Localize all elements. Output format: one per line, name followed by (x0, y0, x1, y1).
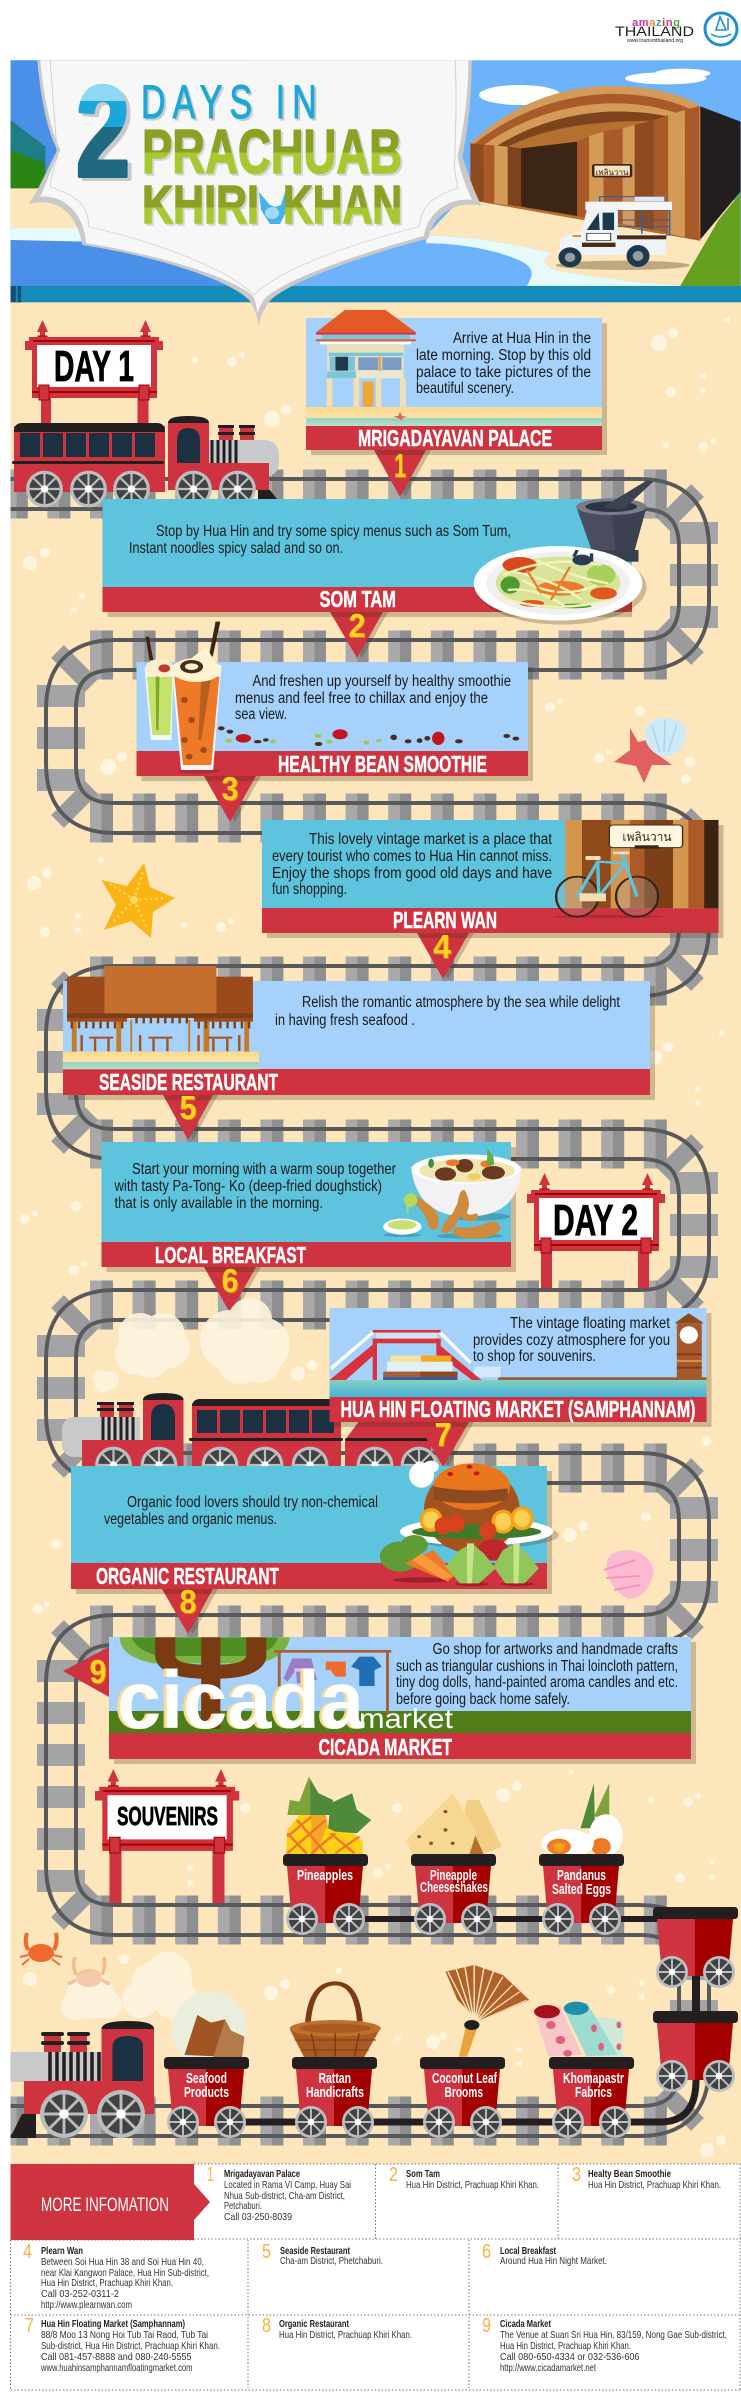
panel 5: Seaside Restaurant (63, 966, 655, 1140)
cart: rattan handicrafts (292, 2057, 377, 2138)
cart: pineapple cheeseshakes: Cheeseshakes (420, 1880, 488, 1896)
info 9: Cicada Market (482, 2315, 727, 2374)
info 6: Local Breakfast: Local Breakfast (500, 2245, 556, 2257)
panel 1: Mrigadayavan Palace (306, 310, 607, 497)
heading: HEALTHY BEAN SMOOTHIE (278, 751, 487, 777)
info 9: Cicada Market: 9 (482, 2315, 491, 2337)
info 1: Mrigadayavan Palace: Mrigadayavan Palace (224, 2168, 300, 2180)
track: railway sleepers and rails (5, 490, 698, 2124)
info 4: Plearn Wan (23, 2241, 209, 2311)
logo text: cicada market: cicada (117, 1655, 365, 1746)
hero sign: Plearn Wan in Thai: เพลินวาน (596, 168, 629, 177)
title banner (29, 60, 481, 326)
text block: in having fresh seafood . (275, 1012, 415, 1029)
panel 7: Hua Hin Floating Market (330, 1308, 712, 1467)
logo text: cicada market: market (359, 1703, 453, 1734)
illustration: salted eggs (541, 1783, 623, 1857)
locomotive (10, 2021, 154, 2138)
info 1: Mrigadayavan Palace: 1 (207, 2164, 214, 2186)
souvenir train: lower engine and carts (10, 1965, 738, 2138)
sign: Day 1: DAY 1 (54, 342, 134, 391)
panel 3: Healthy Bean Smoothie (136, 622, 533, 822)
panel 9: Cicada Market (63, 1637, 696, 1764)
text block: Arrive at Hua Hin in the (453, 330, 591, 347)
info 5: Seaside Restaurant: Cha-am District, Phetchaburi. (280, 2255, 383, 2267)
illustration: vintage wood wall and bicycle (553, 820, 719, 918)
info 9: Cicada Market: Cicada Market (500, 2318, 551, 2330)
text block (129, 523, 511, 557)
info 9: Cicada Market: http://www.cicadamarket.net (500, 2362, 596, 2374)
callout: more information (10, 2164, 210, 2240)
sign: Day 1 (25, 320, 163, 425)
info 6: Local Breakfast: Around Hua Hin Night Market. (500, 2255, 607, 2267)
text block: The vintage floating market (510, 1315, 671, 1332)
pointer 1 (374, 450, 431, 497)
text block: sea view. (235, 706, 287, 723)
info 3: Healty Bean Smoothie: 3 (572, 2164, 581, 2186)
info 9: Cicada Market: Call 080-650-4334 or 032-536-606 (500, 2351, 640, 2363)
number: 1 (394, 447, 406, 484)
info 6: Local Breakfast (482, 2241, 607, 2267)
pointer 6 (204, 1267, 261, 1313)
title: days in: DAYS IN (141, 76, 317, 128)
cart: khomapastr fabrics (549, 2057, 634, 2138)
information section (10, 2164, 741, 2390)
background bubbles (20, 317, 730, 2157)
cart: pineapple cheeseshakes (411, 1854, 496, 1935)
sign: Day 2 (527, 1173, 665, 1288)
cart: pandanus salted eggs (539, 1854, 624, 1935)
info 8: Organic Restaurant: Hua Hin District, Prachuap Khiri Khan. (279, 2329, 412, 2341)
text block: And freshen up yourself by healthy smoothie (252, 673, 511, 690)
logos: Amazing Thailand and tourism authority: amazing (632, 17, 680, 29)
info 4: Plearn Wan: Between Soi Hua Hin 38 and Soi Hua Hin 40, (41, 2256, 204, 2268)
cart: seafood products (164, 2057, 249, 2138)
text block (114, 1161, 396, 1212)
panel 8: Organic Restaurant (71, 1461, 559, 1634)
info 2: Som Tam: Som Tam (406, 2168, 440, 2180)
text block: Instant noodles spicy salad and so on. (129, 540, 343, 557)
callout: more information: MORE INFOMATION (41, 2195, 169, 2216)
sign: Souvenirs (95, 1769, 239, 1903)
illustration: palace (316, 310, 416, 421)
pointer 5 (163, 1095, 218, 1140)
info 7: Hua Hin Floating Market: www.huahinsamphannamfloatingmarket.com (40, 2362, 193, 2374)
illustration: soup and doughsticks (383, 1148, 521, 1239)
heading: ORGANIC RESTAURANT (96, 1563, 279, 1589)
text block: tiny dog dolls, hand-painted aroma candles and etc. (396, 1674, 678, 1691)
pointer 9 (63, 1647, 109, 1697)
title: number 2: 2 (76, 60, 130, 204)
cart: pineapples: Pineapples (297, 1868, 353, 1884)
info 7: Hua Hin Floating Market: Sub-district, Hua Hin District, Prachuap Khiri Khan. (41, 2340, 220, 2352)
info 4: Plearn Wan: http://www.plearnwan.com (41, 2299, 132, 2311)
illustration: khomapastr fabrics (534, 2002, 623, 2057)
text block: Relish the romantic atmosphere by the sea while delight (302, 994, 621, 1011)
info 8: Organic Restaurant: 8 (262, 2315, 271, 2337)
train: second locomotive and carriages (62, 1393, 437, 1483)
illustration: floating market bridge, boat and clock tower (330, 1313, 707, 1380)
heading: PLEARN WAN (393, 907, 497, 933)
info 7: Hua Hin Floating Market: 7 (25, 2315, 34, 2337)
illustration: seaside pavilions (63, 966, 259, 1069)
info 5: Seaside Restaurant: Seaside Restaurant (280, 2245, 350, 2257)
illustration: coconut leaf broom (445, 1965, 529, 2057)
text block: Start your morning with a warm soup together (132, 1161, 396, 1178)
text block: that is only available in the morning. (114, 1195, 323, 1212)
info 5: Seaside Restaurant: 5 (262, 2241, 271, 2263)
text block: Stop by Hua Hin and try some spicy menus such as Som Tum, (156, 523, 511, 540)
cart: pandanus salted eggs: Salted Eggs (552, 1882, 611, 1898)
title: khiri: KHIRI (142, 175, 259, 235)
text block: This lovely vintage market is a place that (309, 831, 553, 848)
sign: Souvenirs: SOUVENIRS (117, 1801, 218, 1831)
icon: butterfly (259, 192, 287, 224)
info 1: Mrigadayavan Palace: Petchaburi. (224, 2200, 262, 2212)
cart: coconut leaf brooms: Coconut Leaf (432, 2071, 497, 2087)
illustration: seafood (172, 1992, 247, 2068)
text block: vegetables and organic menus. (104, 1511, 277, 1528)
pointer 8 (162, 1589, 218, 1634)
text block: to shop for souvenirs. (473, 1348, 596, 1365)
pointer 7 (417, 1422, 474, 1467)
cart: khomapastr fabrics: Fabrics (575, 2085, 612, 2101)
text block: fun shopping. (272, 881, 347, 898)
illustration: smoothies and beans (145, 622, 519, 774)
title: khan: KHAN (283, 175, 402, 235)
heading: LOCAL BREAKFAST (155, 1242, 306, 1268)
text block: palace to take pictures of the (416, 364, 591, 381)
pointer 2 (330, 612, 388, 658)
info 3: Healty Bean Smoothie (572, 2164, 721, 2191)
page background: sand (10, 302, 741, 2164)
heading: CICADA MARKET (318, 1734, 452, 1760)
text block: late morning. Stop by this old (416, 347, 591, 364)
info 3: Healty Bean Smoothie: Healty Bean Smoothie (588, 2168, 671, 2180)
info 7: Hua Hin Floating Market: 88/8 Moo 13 Nong Hoi Tub Tai Raod, Tub Tai (41, 2329, 208, 2341)
text block: with tasty Pa-Tong- Ko (deep-fried doughstick) (114, 1178, 382, 1195)
info 9: Cicada Market: Hua Hin District, Prachuap Khiri Khan. (500, 2340, 631, 2352)
cart: khomapastr fabrics: Khomapastr (563, 2071, 624, 2087)
number: 6 (222, 1262, 238, 1299)
info 8: Organic Restaurant (262, 2315, 412, 2341)
text block (275, 994, 621, 1029)
info 8: Organic Restaurant: Organic Restaurant (279, 2318, 349, 2330)
cart: turn carriage (653, 2011, 738, 2092)
info 1: Mrigadayavan Palace (207, 2164, 351, 2223)
train: first locomotive and carriage (12, 416, 279, 507)
icon: crab pale (68, 1957, 110, 1987)
number: 4 (433, 928, 452, 965)
info 7: Hua Hin Floating Market (25, 2315, 220, 2374)
text block: menus and feel free to chillax and enjoy the (235, 690, 488, 707)
heading: SEASIDE RESTAURANT (99, 1069, 278, 1095)
text block (396, 1641, 678, 1708)
info 4: Plearn Wan: Hua Hin District, Prachuap Khiri Khan. (41, 2277, 173, 2289)
info 2: Som Tam: 2 (389, 2164, 398, 2186)
illustration: cheeseshakes (406, 1793, 502, 1854)
info 2: Som Tam (389, 2164, 539, 2191)
text block: Organic food lovers should try non-chemical (127, 1494, 378, 1511)
info 4: Plearn Wan: Call 03-252-0311-2 (41, 2288, 119, 2300)
text block (235, 673, 511, 723)
cart: rattan handicrafts: Rattan (318, 2071, 351, 2087)
logos: Amazing Thailand and tourism authority: www.tourismthailand.org (627, 38, 683, 44)
illustration: tree and clothes rack (120, 1637, 391, 1729)
cart: rattan handicrafts: Handicrafts (306, 2085, 364, 2101)
text block (473, 1315, 671, 1365)
icon: pink shell (604, 1550, 654, 1599)
cart: coconut leaf brooms: Brooms (444, 2085, 483, 2101)
info 6: Local Breakfast: 6 (482, 2241, 491, 2263)
heading: SOM TAM (320, 586, 396, 612)
info 1: Mrigadayavan Palace: Nhua Sub-district, Cha-am District, (224, 2190, 345, 2202)
icon: red starfish and blue shell (614, 718, 686, 783)
logos: Amazing Thailand and tourism authority: THAILAND (615, 23, 694, 39)
info 1: Mrigadayavan Palace: Call 03-250-8039 (224, 2211, 292, 2223)
text block (104, 1494, 378, 1528)
cart: pandanus salted eggs: Pandanus (557, 1868, 606, 1884)
pointer 3 (204, 776, 261, 822)
info 7: Hua Hin Floating Market: Call 081-457-8888 and 080-240-5555 (41, 2351, 192, 2363)
illustration: mortar and papaya salad (474, 480, 653, 625)
panel 4: Plearn Wan (262, 820, 724, 979)
number: 7 (434, 1416, 452, 1453)
text block: before going back home safely. (396, 1691, 570, 1708)
illustration: rattan basket (290, 1983, 381, 2057)
info 4: Plearn Wan: near Klai Kangwon Palace, Hua Hin Sub-district, (41, 2267, 209, 2279)
cart: seafood products: Seafood (186, 2071, 227, 2087)
text block (272, 831, 553, 898)
info 7: Hua Hin Floating Market: Hua Hin Floating Market (Samphannam) (41, 2318, 185, 2330)
logos: Amazing Thailand and tourism authority (615, 13, 737, 45)
text block: provides cozy atmosphere for you (473, 1332, 670, 1349)
info 2: Som Tam: Hua Hin District, Prachuap Khiri Khan. (406, 2179, 539, 2191)
sign: Plearn Wan in Thai: เพลินวาน (622, 830, 672, 844)
number: 2 (348, 607, 366, 644)
cart: seafood products: Products (184, 2085, 229, 2101)
hero illustration: beach, market gate and truck (11, 60, 741, 302)
info 1: Mrigadayavan Palace: Located in Rama VI Camp, Huay Sai (224, 2179, 351, 2191)
cart: coconut leaf brooms (420, 2057, 505, 2138)
icon: starfish yellow (102, 863, 175, 938)
number: 3 (222, 770, 238, 807)
info 5: Seaside Restaurant (262, 2241, 383, 2267)
text block: Go shop for artworks and handmade crafts (432, 1641, 678, 1658)
heading: MRIGADAYAVAN PALACE (358, 425, 552, 451)
cart: pineapples (283, 1854, 368, 1935)
smoke cloud: lower train (61, 1952, 197, 2020)
text block: every tourist who comes to Hua Hin cannot miss. (272, 848, 552, 865)
illustration: pineapples (286, 1777, 371, 1854)
illustration: roast chicken and vegetables (380, 1461, 559, 1586)
text block: Enjoy the shops from good old days and have (272, 865, 552, 882)
smoke clouds: second train (92, 1298, 290, 1393)
title: prachuab: PRACHUAB (142, 118, 402, 187)
icon: crab orange (20, 1933, 62, 1965)
info 4: Plearn Wan: Plearn Wan (41, 2245, 83, 2257)
souvenir train: upper carts (283, 1777, 738, 2015)
left margin (0, 60, 10, 2164)
number: 8 (180, 1583, 196, 1620)
panel 2: Som Tam (102, 480, 653, 658)
info 4: Plearn Wan: 4 (23, 2241, 32, 2263)
number: 9 (90, 1653, 106, 1690)
panel 6: Local Breakfast (102, 1142, 521, 1313)
pointer 4 (417, 933, 474, 979)
cart: pineapple cheeseshakes: Pineapple (430, 1868, 477, 1884)
number: 5 (180, 1089, 196, 1126)
text block: beautiful scenery. (416, 380, 514, 397)
cart: empty turn carriage (653, 1907, 738, 1988)
sign: Day 2: DAY 2 (553, 1196, 638, 1245)
text block (416, 330, 591, 397)
